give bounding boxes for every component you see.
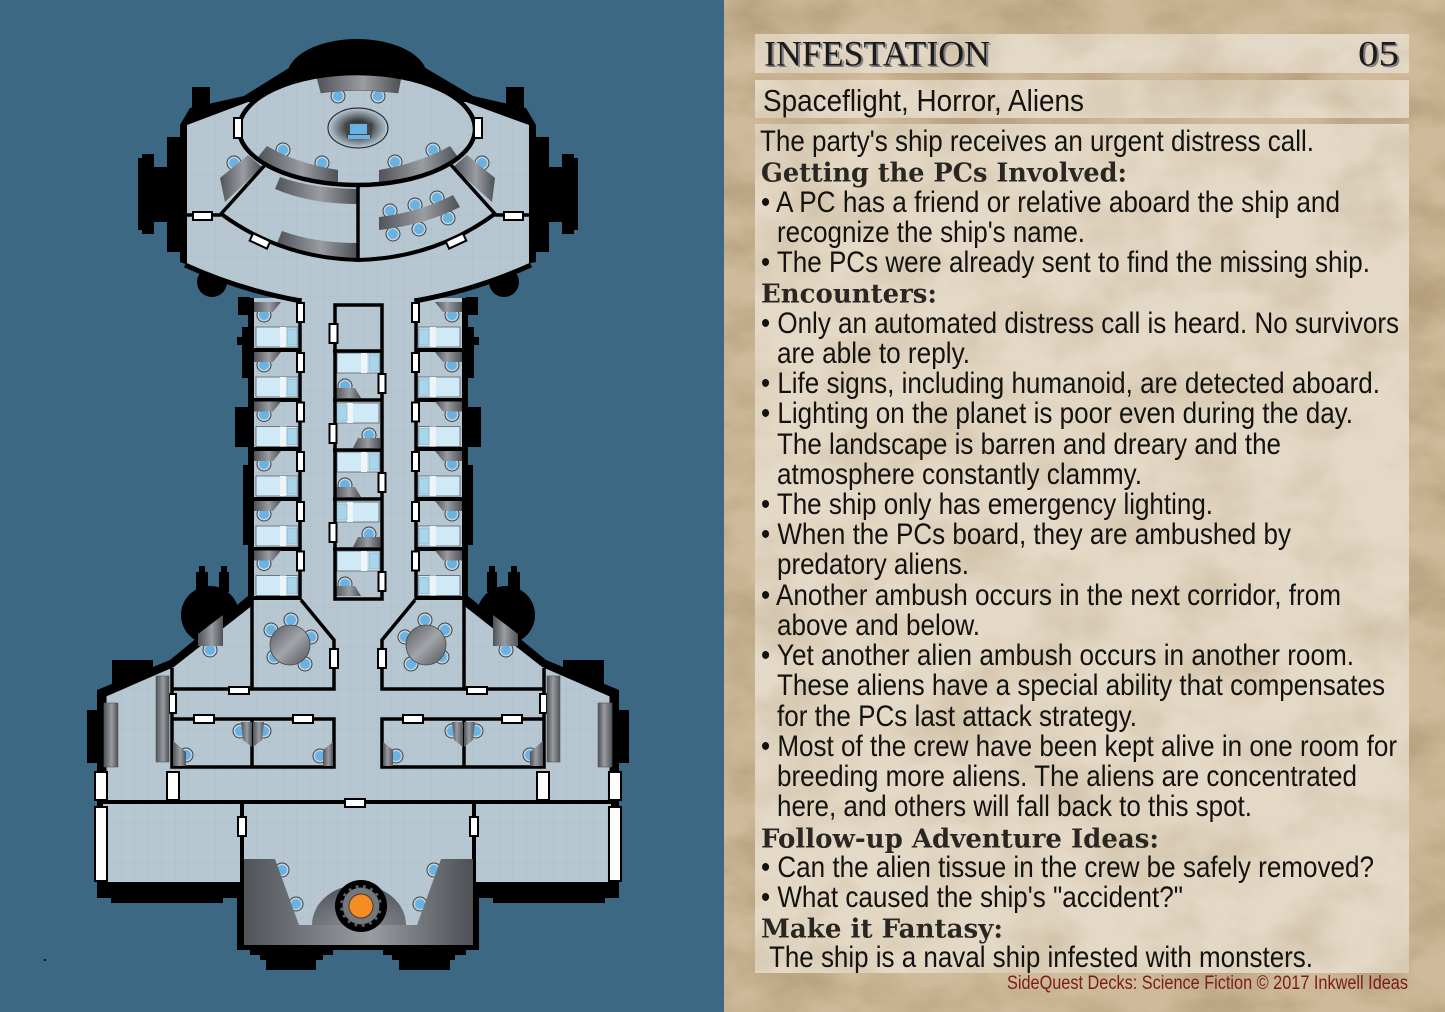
adventure text panel: • Lighting on the planet is poor even during the day.	[761, 397, 1353, 430]
adventure text panel: • Another ambush occurs in the next corridor, from	[761, 579, 1341, 612]
walls and doors right half	[358, 118, 621, 881]
left cabins	[254, 302, 304, 596]
hull black outline and engines	[87, 39, 629, 970]
map background	[0, 0, 724, 1012]
bridge floor	[239, 73, 475, 185]
meeting table right	[398, 613, 452, 671]
deck floor	[103, 102, 611, 945]
title bar	[755, 34, 1409, 75]
adventure text panel: breeding more aliens. The aliens are concentrated	[777, 760, 1357, 793]
lower deck furniture left	[104, 615, 333, 767]
adventure text panel: here, and others will fall back to this spot.	[777, 790, 1252, 823]
adventure text panel: • When the PCs board, they are ambushed by	[761, 518, 1291, 551]
adventure text panel: predatory aliens.	[777, 548, 969, 581]
adventure text panel: The landscape is barren and dreary and the	[777, 428, 1281, 461]
adventure text panel: Getting the PCs Involved:	[761, 159, 1127, 189]
subtitle bar	[755, 80, 1409, 118]
adventure text panel: Encounters:	[761, 280, 937, 310]
adventure text panel: Make it Fantasy:	[761, 915, 1003, 945]
adventure text panel: atmosphere constantly clammy.	[777, 458, 1142, 491]
adventure text panel: for the PCs last attack strategy.	[777, 700, 1137, 733]
title bar: INFESTATION	[764, 34, 990, 74]
subtitle bar: Spaceflight, Horror, Aliens	[763, 83, 1084, 118]
tiny map speck	[44, 959, 46, 961]
title bar: 05	[1358, 34, 1399, 74]
adventure text panel: • Yet another alien ambush occurs in another room.	[761, 639, 1354, 672]
adventure text panel: • Can the alien tissue in the crew be safely removed?	[761, 851, 1374, 884]
adventure text panel: • What caused the ship's "accident?"	[761, 881, 1183, 914]
saucer consoles and chairs	[220, 74, 495, 260]
adventure text panel: • The ship only has emergency lighting.	[761, 488, 1213, 521]
title bar: 05	[1360, 35, 1401, 75]
walls and doors left half	[95, 118, 358, 881]
adventure text panel: • Life signs, including humanoid, are detected aboard.	[761, 367, 1380, 400]
central cabin block	[330, 305, 386, 599]
adventure text panel: • The PCs were already sent to find the missing ship.	[761, 246, 1370, 279]
hull stroke bottom	[103, 882, 611, 888]
right cabins	[412, 302, 462, 596]
adventure text panel: recognize the ship's name.	[777, 216, 1085, 249]
lower deck furniture right	[383, 615, 612, 767]
parchment card background	[724, 0, 1445, 1012]
reactor core	[335, 880, 387, 932]
adventure text panel: The ship is a naval ship infested with monsters.	[769, 941, 1313, 974]
bridge ellipse	[239, 73, 475, 185]
cabin floors	[254, 298, 462, 600]
spaceship deck plan	[87, 39, 629, 970]
adventure text panel	[755, 124, 1409, 974]
command chair pod	[328, 108, 388, 148]
adventure text panel: above and below.	[777, 609, 980, 642]
meeting table left	[264, 613, 318, 671]
engine room	[103, 799, 613, 945]
adventure text panel: are able to reply.	[777, 337, 970, 370]
adventure text panel: The party's ship receives an urgent distress call.	[760, 125, 1314, 158]
title bar: INFESTATION	[766, 35, 992, 75]
saucer centre wall	[356, 185, 360, 260]
adventure text panel: • A PC has a friend or relative aboard the ship and	[761, 186, 1340, 219]
adventure text panel: Follow-up Adventure Ideas:	[761, 825, 1159, 855]
